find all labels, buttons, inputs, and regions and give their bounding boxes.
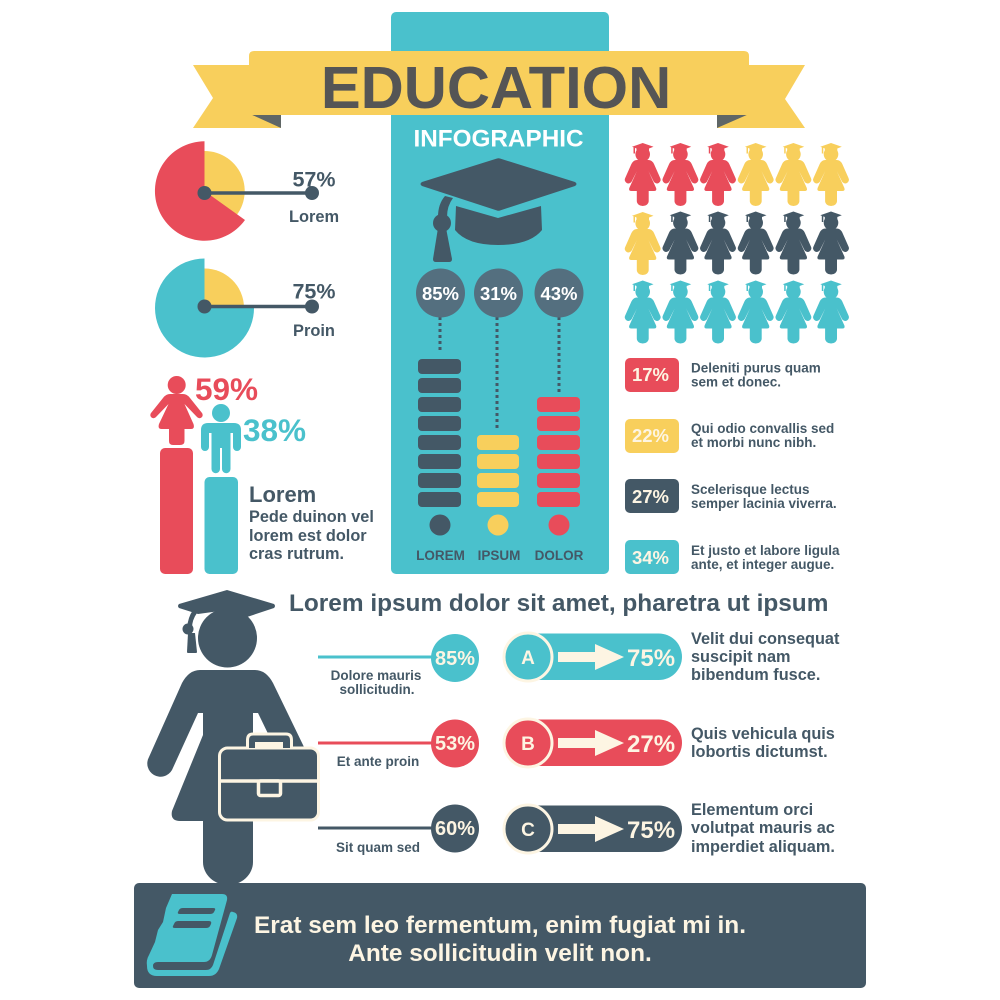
footer text xyxy=(254,912,746,967)
pie chart: 75% Proin xyxy=(155,258,336,358)
legend item: 27%: 27% xyxy=(632,486,669,507)
text block: C description: volutpat mauris ac xyxy=(691,819,835,837)
legend item: 34%: 34% xyxy=(632,547,669,568)
banner ribbon xyxy=(193,51,805,128)
stat: 59%: 59% xyxy=(195,371,258,407)
legend item: 27%: semper lacinia viverra. xyxy=(691,496,837,511)
legend item: 22%: Qui odio convallis sed xyxy=(691,421,834,436)
stat row: 53%: 53% xyxy=(435,733,475,755)
text block: A description: Velit dui consequat xyxy=(691,630,840,648)
text block: Lorem: cras rutrum. xyxy=(249,545,344,563)
pill: C 75% xyxy=(504,805,682,853)
legend item: 17%: sem et donec. xyxy=(691,374,781,390)
text block: B description: lobortis dictumst. xyxy=(691,743,828,761)
bar column: LOREM 85%: 85% xyxy=(422,283,459,304)
subtitle: INFOGRAPHIC xyxy=(413,126,584,152)
legend item: 22%: 22% xyxy=(632,425,669,446)
pie chart: 75% Proin: 75% xyxy=(292,280,336,304)
bar: men xyxy=(204,477,238,574)
text block: A description xyxy=(691,630,840,684)
stat row: 85% xyxy=(318,634,479,697)
pictogram: graduates xyxy=(625,143,849,344)
bar column: DOLOR 43%: 43% xyxy=(540,283,578,304)
text block: B description: Quis vehicula quis xyxy=(691,725,835,743)
pie chart: 57% Lorem: Lorem xyxy=(289,208,339,226)
figure: graduate woman xyxy=(147,590,319,885)
stat row: 53%: Et ante proin xyxy=(337,754,419,769)
pill: A 75%: 75% xyxy=(627,645,675,672)
stat row: 60%: 60% xyxy=(435,818,475,840)
pill: B 27%: B xyxy=(521,734,535,755)
legend item: 22% xyxy=(625,419,834,453)
text block: A description: suscipit nam xyxy=(691,648,791,666)
text block: C description: imperdiet aliquam. xyxy=(691,838,835,856)
stat row: 85%: 85% xyxy=(435,648,475,670)
bar: women xyxy=(160,448,193,574)
pill: C 75%: C xyxy=(521,820,535,841)
pill: A 75%: A xyxy=(521,648,535,669)
text block: C description: Elementum orci xyxy=(691,801,813,819)
pie chart: 57% Lorem xyxy=(155,141,339,241)
legend item: 17% xyxy=(625,358,821,392)
bar column: LOREM 85%: LOREM xyxy=(416,548,465,563)
text block: Lorem xyxy=(249,482,374,563)
gender comparison chart xyxy=(150,371,306,574)
bar column: LOREM 85% xyxy=(416,268,465,563)
icon: woman xyxy=(150,376,203,445)
pictogram row 1 xyxy=(625,143,849,206)
icon: briefcase xyxy=(218,734,320,820)
legend item: 27% xyxy=(625,479,837,513)
stat: 38%: 38% xyxy=(243,412,306,448)
bar column: IPSUM 31%: 31% xyxy=(480,283,517,304)
footer text: Ante sollicitudin velit non. xyxy=(348,940,652,967)
text block: C description xyxy=(691,801,835,856)
legend item: 22%: et morbi nunc nibh. xyxy=(691,435,816,450)
stat row: 85%: sollicitudin. xyxy=(339,682,415,697)
title: EDUCATION xyxy=(321,54,671,121)
legend item: 34%: ante, et integer augue. xyxy=(691,557,834,572)
heading: lower section: Lorem ipsum dolor sit amet, pharetra ut ipsum xyxy=(289,590,828,617)
bar column: DOLOR 43%: DOLOR xyxy=(535,548,584,563)
legend item: 17%: Deleniti purus quam xyxy=(691,360,821,376)
pill: B 27%: 27% xyxy=(627,731,675,758)
pill: C 75%: 75% xyxy=(627,817,675,844)
panel: central teal column xyxy=(391,12,609,574)
bar column: DOLOR 43% xyxy=(534,268,584,563)
stat row: 53% xyxy=(318,720,479,769)
footer text: Erat sem leo fermentum, enim fugiat mi in. xyxy=(254,912,746,939)
pie chart: 75% Proin: Proin xyxy=(293,322,335,340)
stat row: 60%: Sit quam sed xyxy=(336,840,420,855)
pictogram row 3 xyxy=(625,280,849,344)
icon: graduation cap xyxy=(420,158,576,262)
icon: book xyxy=(147,894,237,976)
text block: Lorem: Pede duinon vel xyxy=(249,508,374,526)
pie chart: 57% Lorem: 57% xyxy=(292,168,336,192)
pill: A 75% xyxy=(504,633,682,681)
pill: B 27% xyxy=(504,719,682,767)
bar column: IPSUM 31%: IPSUM xyxy=(478,548,520,563)
pictogram row 2 xyxy=(625,212,849,275)
legend item: 27%: Scelerisque lectus xyxy=(691,482,810,497)
legend item: 34% xyxy=(625,540,840,574)
bar column: IPSUM 31% xyxy=(474,268,523,563)
legend item: 17%: 17% xyxy=(632,364,669,385)
text block: Lorem: lorem est dolor xyxy=(249,527,367,545)
icon: man xyxy=(201,404,241,473)
text block: A description: bibendum fusce. xyxy=(691,666,820,684)
text block: B description xyxy=(691,725,835,761)
legend item: 34%: Et justo et labore ligula xyxy=(691,543,840,558)
stat row: 85%: Dolore mauris xyxy=(331,668,421,683)
footer panel xyxy=(134,883,866,988)
text block: Lorem: Lorem xyxy=(249,482,316,507)
stat row: 60% xyxy=(318,804,479,855)
